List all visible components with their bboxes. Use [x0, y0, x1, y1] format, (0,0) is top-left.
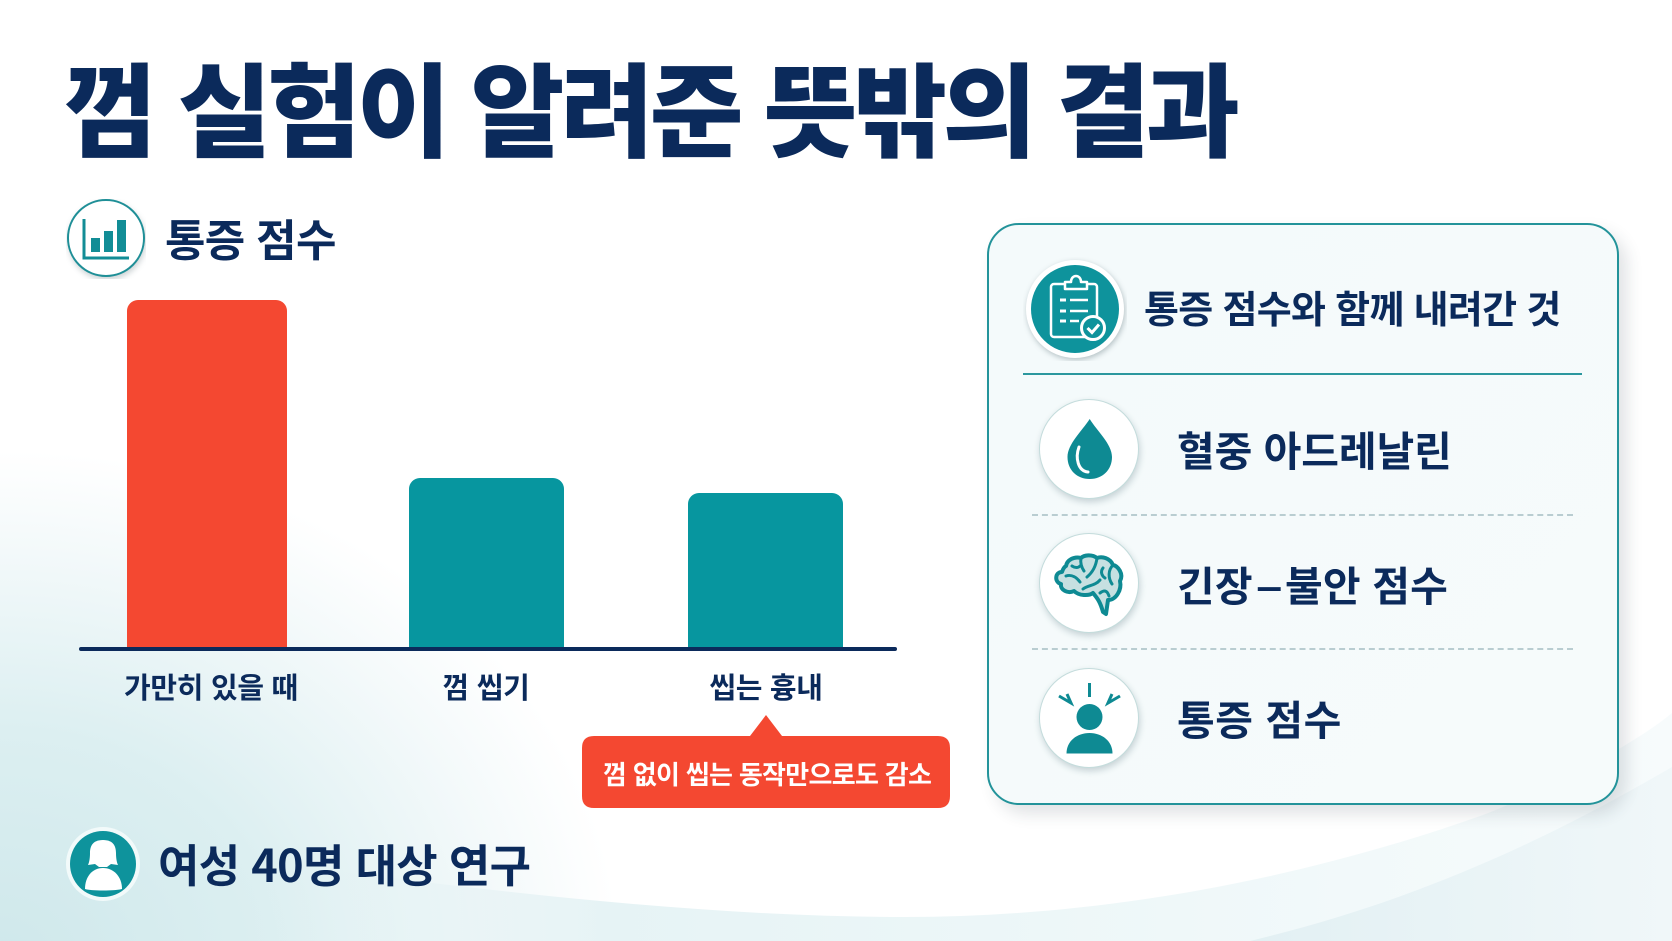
row text: – [1255, 553, 1283, 613]
row text: 긴장 불안 점수 [1177, 553, 1448, 613]
row text: 통증 점수 [1177, 687, 1342, 747]
callout [582, 715, 950, 808]
icon: bar chart [66, 199, 146, 279]
label: 가만히 있을 때: 가만히 있을 때 [124, 665, 298, 707]
row: 통증 점수 [1037, 668, 1342, 774]
bar: 씹는 흉내 [688, 493, 843, 648]
title: 껌 실험이 알려준 뜻밖의 결과 [64, 32, 1236, 179]
panel heading: 통증 점수와 함께 내려간 것 [1144, 279, 1561, 334]
label: 껌 씹기: 껌 씹기 [443, 665, 529, 707]
row: 긴장-불안 점수 [1037, 533, 1448, 639]
bar: 가만히 있을 때 [127, 300, 287, 648]
row text: 혈중 아드레날린 [1177, 418, 1452, 478]
callout shape [582, 715, 950, 808]
label: 씹는 흉내: 씹는 흉내 [709, 665, 823, 707]
bar: 껌 씹기 [409, 478, 564, 648]
icon: woman [66, 827, 140, 901]
divider [1023, 373, 1582, 375]
dashed separator [1032, 648, 1573, 650]
axis line [79, 647, 897, 651]
callout text: 껌 없이 씹는 동작만으로도 감소 [603, 755, 931, 792]
dashed separator [1032, 514, 1573, 516]
chart section heading [66, 199, 336, 279]
study note [66, 827, 530, 901]
icon: person in pain [1039, 668, 1139, 768]
icon: water drop [1039, 399, 1139, 499]
panel header icon: clipboard [1024, 259, 1127, 361]
heading text: 통증 점수 [165, 205, 336, 269]
panel: what went down together [987, 223, 1619, 805]
note text: 여성 40명 대상 연구 [158, 830, 530, 895]
bar chart [79, 300, 897, 707]
row: 혈중 아드레날린 [1037, 399, 1452, 505]
icon: brain [1039, 533, 1139, 633]
